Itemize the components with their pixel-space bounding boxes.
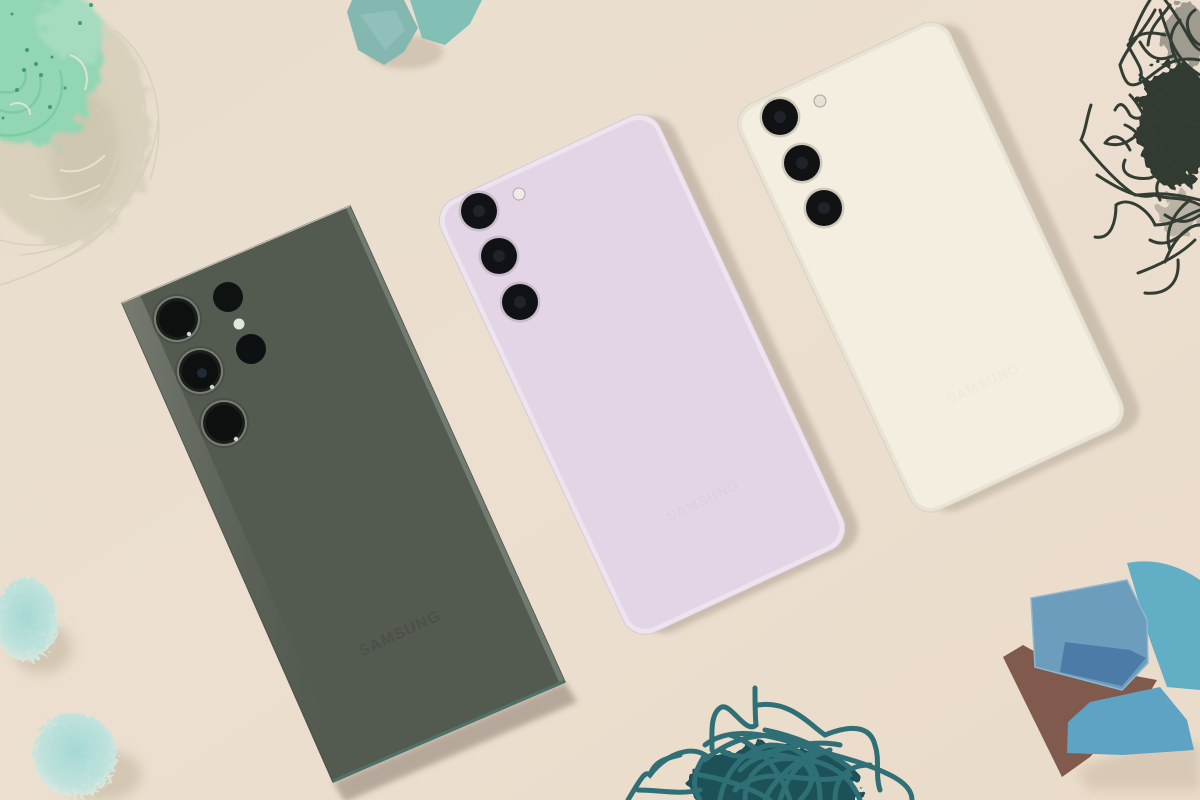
- sea glass pile: [1003, 561, 1200, 790]
- dark blue overlap: [1060, 642, 1146, 686]
- phone: green: [122, 206, 565, 782]
- green net decoration: [0, 0, 159, 285]
- lower teal shard: [1067, 687, 1194, 755]
- dark green seaweed: [1081, 0, 1200, 293]
- shadow: cream phone: [749, 16, 1147, 519]
- brand mark: cream phone: SAMSUNG: [944, 360, 1022, 407]
- teal rope tangle: [628, 688, 912, 800]
- phone: lilac: [431, 107, 853, 642]
- camera cluster: green phone: [152, 282, 266, 448]
- camera cluster: lilac phone: [458, 188, 540, 322]
- teal quarter shard: [1127, 561, 1200, 690]
- pale yarn ball lower left: [33, 713, 142, 800]
- blue translucent shard: [1031, 580, 1148, 690]
- phone: cream: [730, 15, 1131, 519]
- shadow: lilac phone: [449, 108, 867, 642]
- brown shard: [1003, 645, 1157, 777]
- pale yarn ball left: [0, 578, 72, 674]
- camera cluster: cream phone: [760, 95, 844, 228]
- shadow: green phone: [333, 682, 577, 800]
- brand mark: lilac phone: SAMSUNG: [664, 477, 742, 524]
- top rocks: [347, 0, 482, 69]
- brand mark: green phone: SAMSUNG: [356, 607, 444, 660]
